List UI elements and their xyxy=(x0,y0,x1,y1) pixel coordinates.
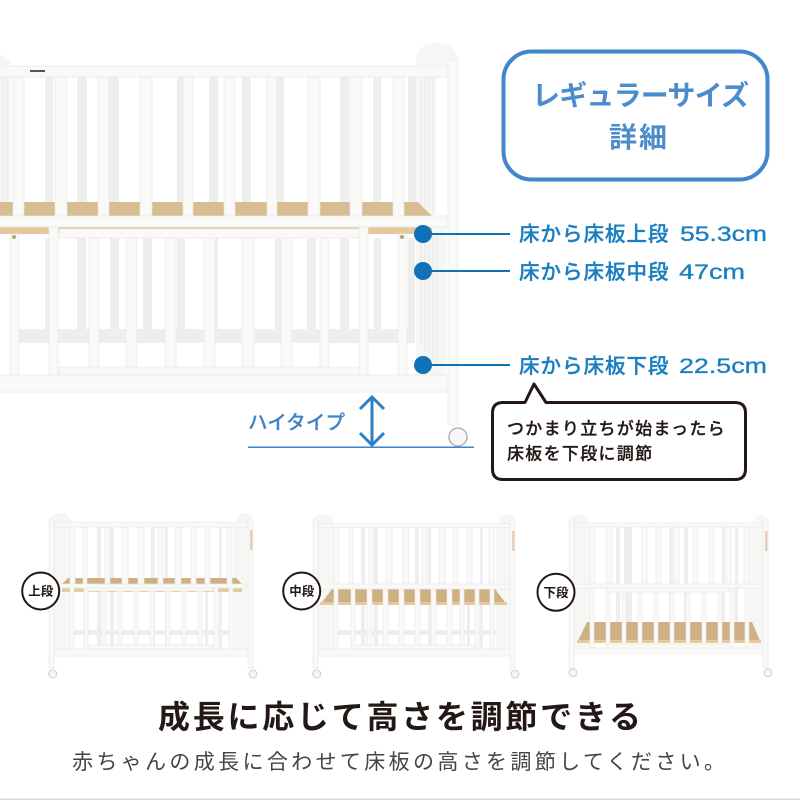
label: top height xyxy=(519,223,767,246)
label: middle height xyxy=(519,261,745,284)
small crib: lower position xyxy=(569,515,772,677)
speech bubble xyxy=(492,384,746,480)
label: high type: ハイタイプ xyxy=(248,412,345,434)
arrow: floor clearance xyxy=(360,397,384,445)
badge: middle: 中段 xyxy=(289,584,315,598)
badge: lower xyxy=(538,574,574,611)
label: middle height: 床から床板中段 xyxy=(519,261,670,284)
small crib: upper position xyxy=(49,513,257,678)
badge: upper xyxy=(22,572,59,610)
label: middle height: 47cm xyxy=(679,261,745,284)
caster xyxy=(449,428,467,446)
callout line: middle height xyxy=(414,262,510,280)
title box: 詳細 xyxy=(609,122,667,153)
subheading: 赤ちゃんの成長に合わせて床板の高さを調節してください。 xyxy=(72,751,725,774)
label: bottom height: 床から床板下段 xyxy=(519,355,670,378)
label: bottom height xyxy=(519,355,767,378)
badge: upper: 上段 xyxy=(28,584,54,598)
callout line: top height xyxy=(414,225,510,243)
label: top height: 55.3cm xyxy=(680,223,767,246)
heading: 成長に応じて高さを調節できる xyxy=(158,699,641,735)
speech bubble: つかまり立ちが始まったら xyxy=(507,418,726,438)
title box: レギュラーサイズ xyxy=(532,79,749,111)
badge: lower: 下段 xyxy=(543,586,569,600)
bottom edge line xyxy=(0,798,800,800)
floor line xyxy=(248,446,474,448)
badge: middle xyxy=(283,572,320,610)
title box xyxy=(504,52,768,180)
lower section xyxy=(416,227,446,375)
label: top height: 床から床板上段 xyxy=(519,223,670,246)
label: bottom height: 22.5cm xyxy=(679,355,767,378)
main crib photo xyxy=(0,43,467,446)
speech bubble: 床板を下段に調節 xyxy=(507,444,653,464)
small crib: middle position xyxy=(313,514,519,678)
callout line: bottom height xyxy=(414,356,510,374)
